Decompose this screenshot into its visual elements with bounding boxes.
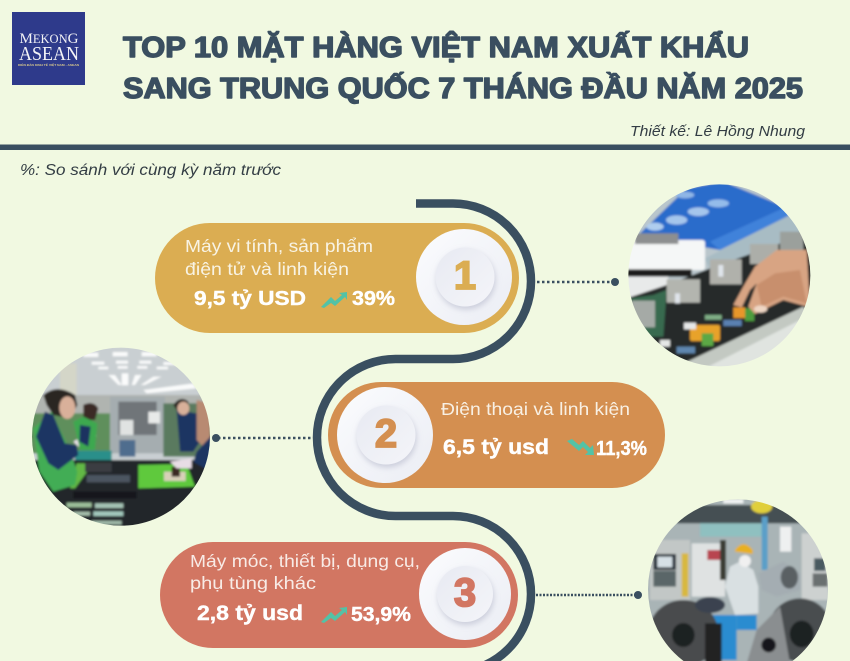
number badge 2: 2 bbox=[375, 412, 397, 456]
item 2 label: Điện thoại và linh kiện bbox=[441, 399, 630, 419]
connector: item 2 to photo bbox=[212, 434, 312, 442]
connector: item 3 to photo bbox=[536, 591, 642, 599]
photo: phone assembly line workers bbox=[32, 348, 210, 526]
number badge 1 bbox=[416, 229, 512, 325]
logo: Mekong ASEAN: ASEAN bbox=[19, 43, 79, 65]
note: comparison basis: %: So sánh với cùng kỳ năm trước bbox=[20, 162, 281, 179]
winding timeline path bbox=[317, 204, 531, 661]
item 3 label: phụ tùng khác bbox=[190, 573, 316, 593]
item 2 change: 11,3% bbox=[596, 438, 647, 460]
number badge 2 bbox=[337, 387, 433, 483]
item 1 label: điện tử và linh kiện bbox=[185, 259, 349, 279]
panel: item 3 machinery bbox=[160, 542, 518, 648]
item 1 label bbox=[185, 236, 373, 279]
item 1 change: 39% bbox=[352, 288, 395, 310]
number badge 3 bbox=[419, 548, 511, 640]
logo: Mekong ASEAN bbox=[12, 12, 85, 85]
item 3 label: Máy móc, thiết bị, dụng cụ, bbox=[190, 551, 420, 571]
logo: Mekong ASEAN: MEKONG bbox=[20, 31, 79, 47]
number badge 1: 1 bbox=[454, 254, 476, 298]
photo: technician with machinery bbox=[647, 497, 833, 661]
item 3 change: 53,9% bbox=[351, 604, 411, 626]
logo: Mekong ASEAN: DIỄN ĐÀN KINH TẾ VIỆT NAM - ASEAN bbox=[18, 62, 79, 67]
icon: up trend arrow bbox=[321, 607, 347, 623]
item 3 value: 2,8 tỷ usd bbox=[197, 602, 303, 625]
photo: circuit board assembly bbox=[627, 182, 813, 370]
panel: item 2 phones bbox=[328, 382, 665, 488]
title: SANG TRUNG QUỐC 7 THÁNG ĐẦU NĂM 2025 bbox=[123, 72, 803, 105]
icon: down trend arrow bbox=[567, 439, 594, 455]
panel: item 1 computers bbox=[155, 223, 519, 333]
title: TOP 10 MẶT HÀNG VIỆT NAM XUẤT KHẨU bbox=[123, 32, 749, 64]
title bbox=[123, 32, 803, 105]
designer credit: Thiết kế: Lê Hồng Nhung bbox=[630, 124, 805, 140]
item 3 label bbox=[190, 551, 420, 593]
number badge 3: 3 bbox=[454, 571, 476, 615]
icon: up trend arrow bbox=[321, 292, 347, 308]
item 1 label: Máy vi tính, sản phẩm bbox=[185, 236, 373, 256]
item 1 value: 9,5 tỷ USD bbox=[194, 288, 306, 310]
connector: item 1 to photo bbox=[537, 278, 619, 286]
item 2 value: 6,5 tỷ usd bbox=[443, 436, 549, 459]
